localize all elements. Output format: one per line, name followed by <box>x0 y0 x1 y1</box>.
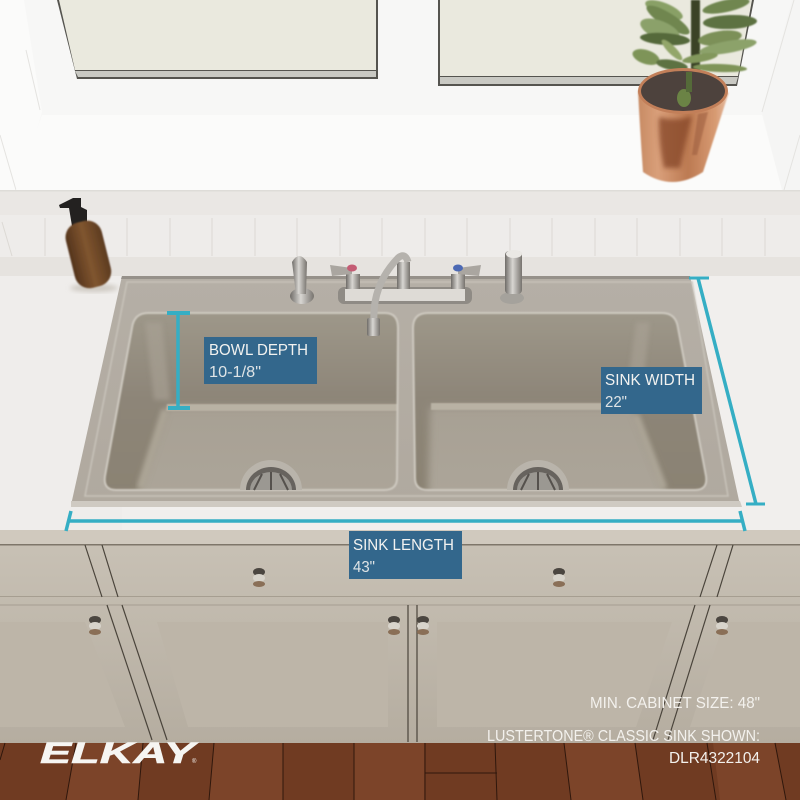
right drain <box>507 460 569 490</box>
spout <box>367 256 410 336</box>
faucet deck plate <box>338 287 472 304</box>
right soap dispenser <box>500 250 524 304</box>
bottle body <box>62 217 114 291</box>
left window pane <box>57 0 378 79</box>
right window pane <box>438 0 754 86</box>
dimension: bowl depth <box>167 313 190 408</box>
wood floor <box>0 743 800 800</box>
elkay logo: ® <box>192 758 197 765</box>
right bowl <box>412 312 708 492</box>
sink model note <box>487 728 760 767</box>
label: bowl depth <box>204 337 317 384</box>
left side spray <box>290 256 314 304</box>
pump <box>59 198 87 226</box>
beadboard backsplash <box>0 215 800 257</box>
marble countertop <box>0 257 800 530</box>
stainless steel sink <box>71 276 742 507</box>
elkay logo: ELKAY <box>40 737 200 770</box>
cabinets <box>0 530 800 744</box>
cabinet gaps <box>85 545 733 742</box>
elkay logo <box>40 737 200 770</box>
hot handle <box>330 264 360 289</box>
label: bowl depth: 10-1/8" <box>209 364 261 381</box>
copper pot <box>638 90 729 182</box>
sink model note: LUSTERTONE® CLASSIC SINK SHOWN: <box>487 728 760 745</box>
sink model note: DLR4322104 <box>669 750 760 767</box>
window and wall <box>0 0 800 195</box>
label: sink width: SINK WIDTH <box>605 372 695 389</box>
label: sink width <box>601 367 702 414</box>
knobs <box>89 568 728 635</box>
window sill <box>16 115 782 190</box>
sink rim <box>71 276 740 505</box>
soap bottle <box>59 198 118 292</box>
label: bowl depth: BOWL DEPTH <box>209 342 308 359</box>
label: sink length: SINK LENGTH <box>353 537 454 554</box>
door panels <box>0 622 800 727</box>
label: sink length <box>349 531 462 579</box>
plant in copper pot <box>631 0 758 182</box>
faucet <box>290 250 524 336</box>
label: sink width: 22" <box>605 394 627 411</box>
cabinet size note: MIN. CABINET SIZE: 48" <box>590 695 760 712</box>
dimension: sink width <box>689 278 765 504</box>
dimension: sink length <box>66 511 745 531</box>
plant stem and leaves <box>631 0 758 80</box>
pot rim and soil <box>638 68 728 114</box>
left drain <box>240 460 302 490</box>
label: sink length: 43" <box>353 559 375 576</box>
sill front edge <box>0 190 800 215</box>
left bowl <box>104 312 400 492</box>
cold handle <box>451 264 481 289</box>
